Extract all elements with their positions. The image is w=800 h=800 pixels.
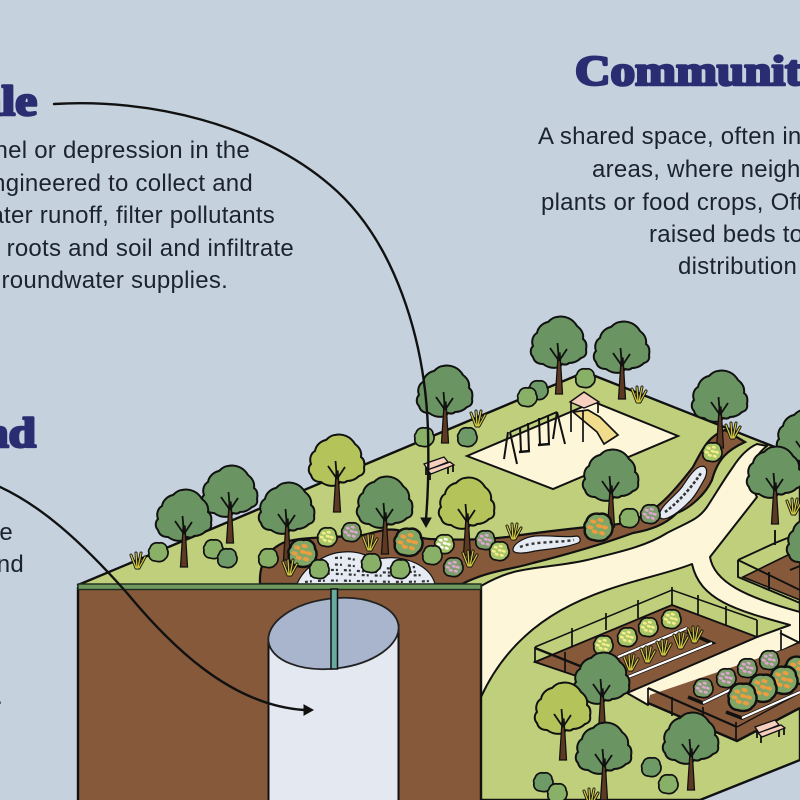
raised planter rails: [618, 628, 712, 677]
lower lawn shrubs: [534, 758, 678, 800]
community garden bed 3: [738, 530, 800, 603]
small shrubs on lawn: [149, 369, 595, 568]
lawn grasses: [131, 387, 800, 800]
soil face: [78, 588, 481, 800]
fence: [648, 630, 800, 741]
gravel bed: large: [297, 552, 435, 584]
park bench: [424, 457, 454, 480]
text block: community garden description: [538, 123, 800, 280]
gravel bed: middle: [513, 536, 580, 553]
pink flowering shrubs: [694, 651, 779, 698]
path network: [481, 444, 800, 705]
community garden bed 1: [535, 587, 757, 693]
soil cross-section: [78, 584, 481, 800]
bioswale planting: [283, 443, 722, 579]
text block: underground description: [0, 519, 24, 710]
bioswale soil: [260, 430, 745, 584]
inlet pipe: [331, 589, 338, 669]
bed soil: [648, 643, 800, 740]
tower: [570, 392, 599, 442]
grass row: [624, 627, 702, 670]
community garden bed 2: [648, 630, 800, 743]
turf strip: [78, 584, 481, 590]
text block: bioswale description: [0, 137, 294, 294]
playground: [467, 392, 678, 489]
bed soil: [535, 605, 757, 693]
swing set: [504, 412, 565, 464]
upper background trees: [156, 316, 800, 567]
arrow: bioswale label to swale: [54, 103, 431, 527]
ground surface: [78, 372, 800, 800]
slide: [573, 410, 618, 444]
arrow: underground label to cistern: [0, 486, 313, 715]
bioswale trees: [259, 446, 800, 560]
orange flowering shrubs: [728, 657, 800, 711]
underground cistern: [264, 589, 403, 800]
playground sand area: [467, 402, 678, 489]
cistern opening: [264, 591, 403, 676]
bench: [755, 720, 785, 743]
yellow flowering shrubs: [594, 610, 681, 655]
lower lawn trees: [535, 514, 800, 800]
raised planter rails: [688, 690, 800, 718]
fence: [535, 587, 757, 673]
cistern body: [268, 625, 398, 800]
gravel bed: upper: [659, 466, 707, 519]
